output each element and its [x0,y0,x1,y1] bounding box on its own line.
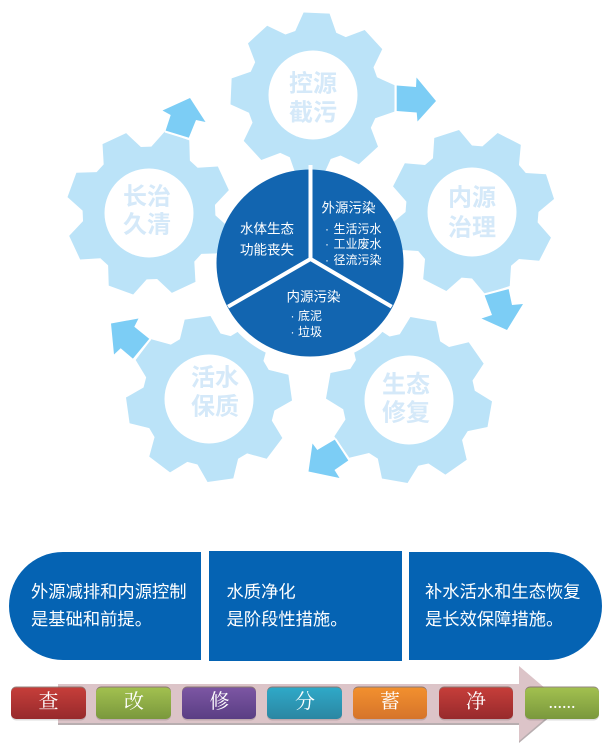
step: ellipsis: ...... [548,692,576,712]
panel: 水质净化: 水质净化 [226,582,296,602]
pie segment text: 内源污染: · [290,325,294,339]
gear: 活水保质 [116,306,302,492]
gear label: 活水保质: 活水 [191,364,239,392]
step: 净 [439,686,513,720]
step: 修: 修 [210,690,230,713]
step: 查: 查 [38,690,58,713]
arrow: left gear to top gear [162,98,206,139]
pie segment text: 外源污染: · [325,222,329,236]
panel: 补水活水和生态恢复 [409,552,602,660]
gear label: 内源治理 [448,184,496,242]
step: 蓄: 蓄 [380,690,400,713]
gear label: 活水保质: 保质 [191,394,239,420]
step: 改: 改 [124,690,144,713]
pie segment text: 水体生态功能丧失 [240,222,294,258]
panel: 水质净化: 是阶段性措施。 [226,609,347,629]
gear: 内源治理 [362,102,582,322]
step: 净: 净 [466,690,486,713]
arrow: lower left gear to left gear [111,318,150,360]
center pie: pollution causes [216,165,404,356]
panel: 水质净化 [209,551,402,661]
gear label: 长治久清 [123,184,171,238]
panel: 外源减排和内源控制: 是基础和前提。 [31,609,152,629]
pie segment text: 外源污染: 外源污染 [322,200,376,216]
panel: 外源减排和内源控制: 外源减排和内源控制 [31,582,187,602]
gear label: 生态修复 [382,372,430,426]
panel: 补水活水和生态恢复: 是长效保障措施。 [425,609,563,629]
pie segment text: 内源污染: 垃圾 [298,324,322,339]
pie segment text: 外源污染: · [325,237,329,251]
step: 分 [267,686,342,720]
gear: 控源截污 [228,10,398,180]
arrow: right gear to lower gear [482,288,523,330]
pie segment text: 外源污染: 径流污染 [334,252,382,267]
pie segment text: 水体生态功能丧失: 水体生态 [240,222,294,236]
gear: 长治久清 [44,108,254,318]
process arrow [58,666,564,743]
gear label: 长治久清: 长治 [123,184,171,210]
step: 修 [182,686,256,720]
gear label: 活水保质 [191,364,239,420]
pie segment text: 内源污染: 底泥 [298,308,322,323]
step: 改 [96,686,171,720]
step: 分: 分 [295,690,315,713]
pie segment text: 外源污染: 生活污水 [334,222,382,236]
gear label: 生态修复: 修复 [382,400,430,426]
gear label: 内源治理: 治理 [448,214,496,242]
gear label: 内源治理: 内源 [448,184,496,212]
gear label: 生态修复: 生态 [382,372,430,398]
pie segment text: 外源污染: · [325,253,329,267]
gear label: 长治久清: 久清 [123,212,171,238]
pie segment text: 内源污染 [286,290,341,339]
gear label: 控源截污: 控源 [289,70,337,98]
pie segment text: 内源污染: · [290,309,294,323]
pie segment text: 外源污染 [322,200,382,267]
arrow: top gear to right gear [396,78,436,122]
step: 蓄 [353,686,427,720]
gear: 生态修复 [314,305,504,495]
arrow: lower right gear to lower left gear [308,439,350,478]
step: 查 [11,686,86,720]
pie segment text: 外源污染: 工业废水 [334,236,382,251]
panel: 外源减排和内源控制 [9,552,201,660]
pie segment text: 水体生态功能丧失: 功能丧失 [240,242,294,258]
gear label: 控源截污 [289,70,337,126]
gear label: 控源截污: 截污 [289,100,337,126]
pie segment text: 内源污染: 内源污染 [286,290,341,304]
panel: 补水活水和生态恢复: 补水活水和生态恢复 [425,582,581,602]
step: ellipsis [525,686,599,720]
